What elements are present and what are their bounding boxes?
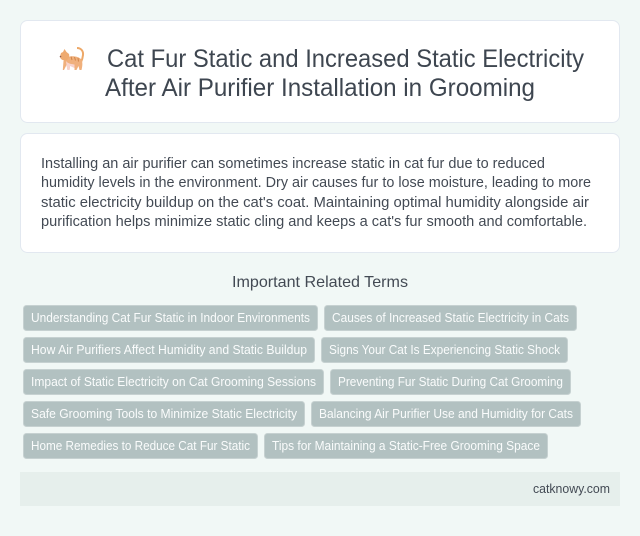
panel: summary paragraph: humidity levels in the environment. Dry air causes fur to lose moisture, leading to more <box>41 174 591 191</box>
tag <box>24 434 258 458</box>
tag: Understanding Cat Fur Static in Indoor Environments <box>31 310 310 325</box>
title text <box>105 46 585 102</box>
tag <box>24 370 324 394</box>
title text: After Air Purifier Installation in Grooming <box>105 75 535 102</box>
heading: important related terms: Important Related Terms <box>232 274 408 291</box>
tag: Impact of Static Electricity on Cat Grooming Sessions <box>31 374 316 389</box>
footer bar <box>20 472 620 506</box>
tag: Balancing Air Purifier Use and Humidity for Cats <box>319 406 573 421</box>
tag list <box>24 306 580 458</box>
panel: summary paragraph: static electricity buildup on the cat's coat. Maintaining optimal humidity alongside air <box>41 194 589 211</box>
panel: title card <box>20 20 620 122</box>
tag <box>24 338 314 362</box>
panel: summary paragraph <box>20 134 620 252</box>
tag: Tips for Maintaining a Static-Free Grooming Space <box>272 438 540 453</box>
tag: Causes of Increased Static Electricity in Cats <box>332 310 569 325</box>
tag <box>324 306 576 330</box>
title text: Cat Fur Static and Increased Static Electricity <box>107 46 585 73</box>
tag: Preventing Fur Static During Cat Grooming <box>338 374 563 389</box>
tag: Safe Grooming Tools to Minimize Static Electricity <box>31 406 298 421</box>
tag <box>330 370 570 394</box>
panel: summary paragraph: purification helps minimize static cling and keeps a cat's fur smooth and comfortable. <box>41 213 587 230</box>
tag: Signs Your Cat Is Experiencing Static Shock <box>329 342 561 357</box>
tag <box>24 306 318 330</box>
tag: Home Remedies to Reduce Cat Fur Static <box>31 438 251 453</box>
tag <box>264 434 548 458</box>
tag <box>322 338 568 362</box>
tag: How Air Purifiers Affect Humidity and Static Buildup <box>31 342 307 357</box>
tag <box>312 402 580 426</box>
tag <box>24 402 304 426</box>
footer bar: catknowy.com <box>533 481 610 496</box>
panel: summary paragraph: Installing an air purifier can sometimes increase static in cat fur due to reduced <box>41 155 545 172</box>
icon: cat <box>60 48 83 70</box>
